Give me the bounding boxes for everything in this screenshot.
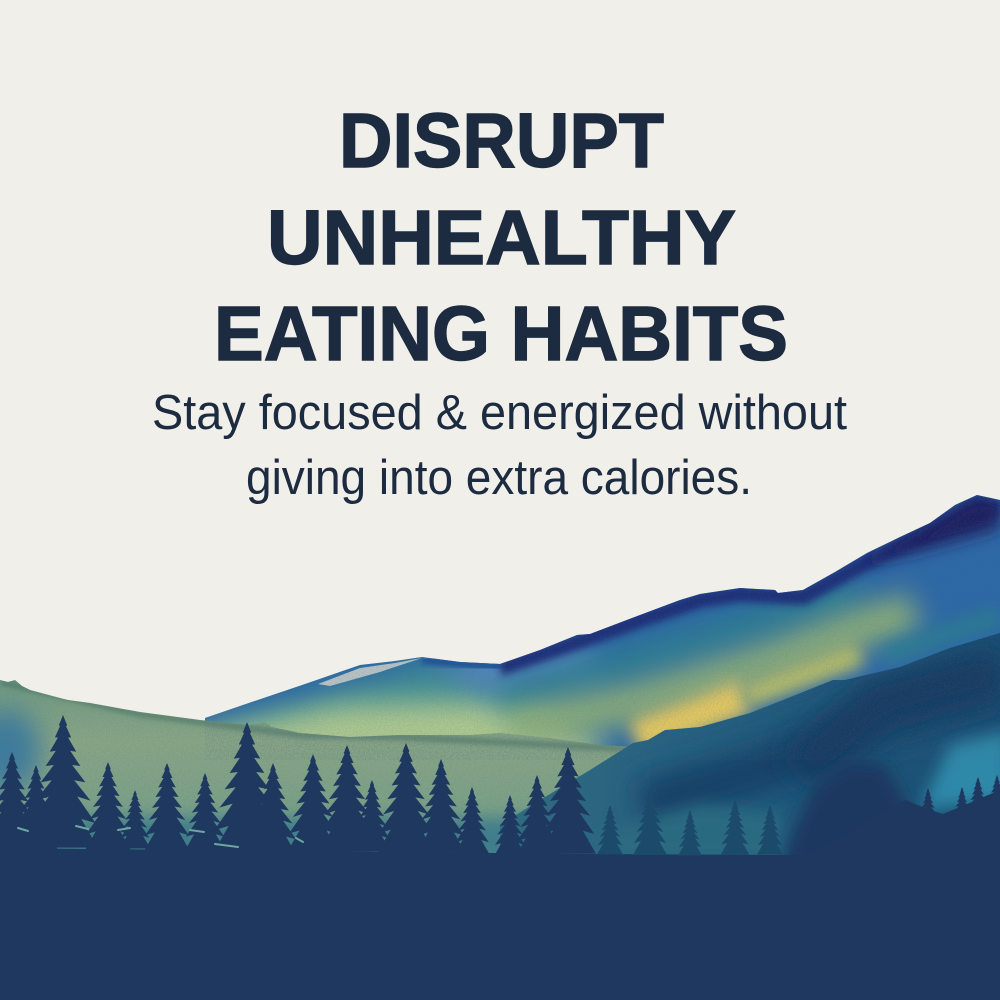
front dark blue hill [500, 630, 1000, 870]
middle green hill [0, 680, 627, 853]
back mountain range [205, 495, 1000, 747]
watercolor grain [200, 490, 1000, 770]
subtitle: giving into extra calories. [246, 451, 752, 505]
title: DISRUPT [339, 98, 664, 184]
title: UNHEALTHY [267, 195, 736, 281]
pine tree line [0, 715, 1000, 857]
subtitle [152, 386, 847, 505]
subtitle: Stay focused & energized without [152, 386, 847, 440]
title: EATING HABITS [214, 291, 788, 377]
faded teal trees [597, 790, 783, 856]
title [214, 98, 788, 377]
teal highlights between trees [18, 826, 303, 847]
blurred dark forest mass [780, 760, 915, 870]
navy foreground [0, 790, 1000, 1000]
grain on lower hills [0, 690, 650, 835]
